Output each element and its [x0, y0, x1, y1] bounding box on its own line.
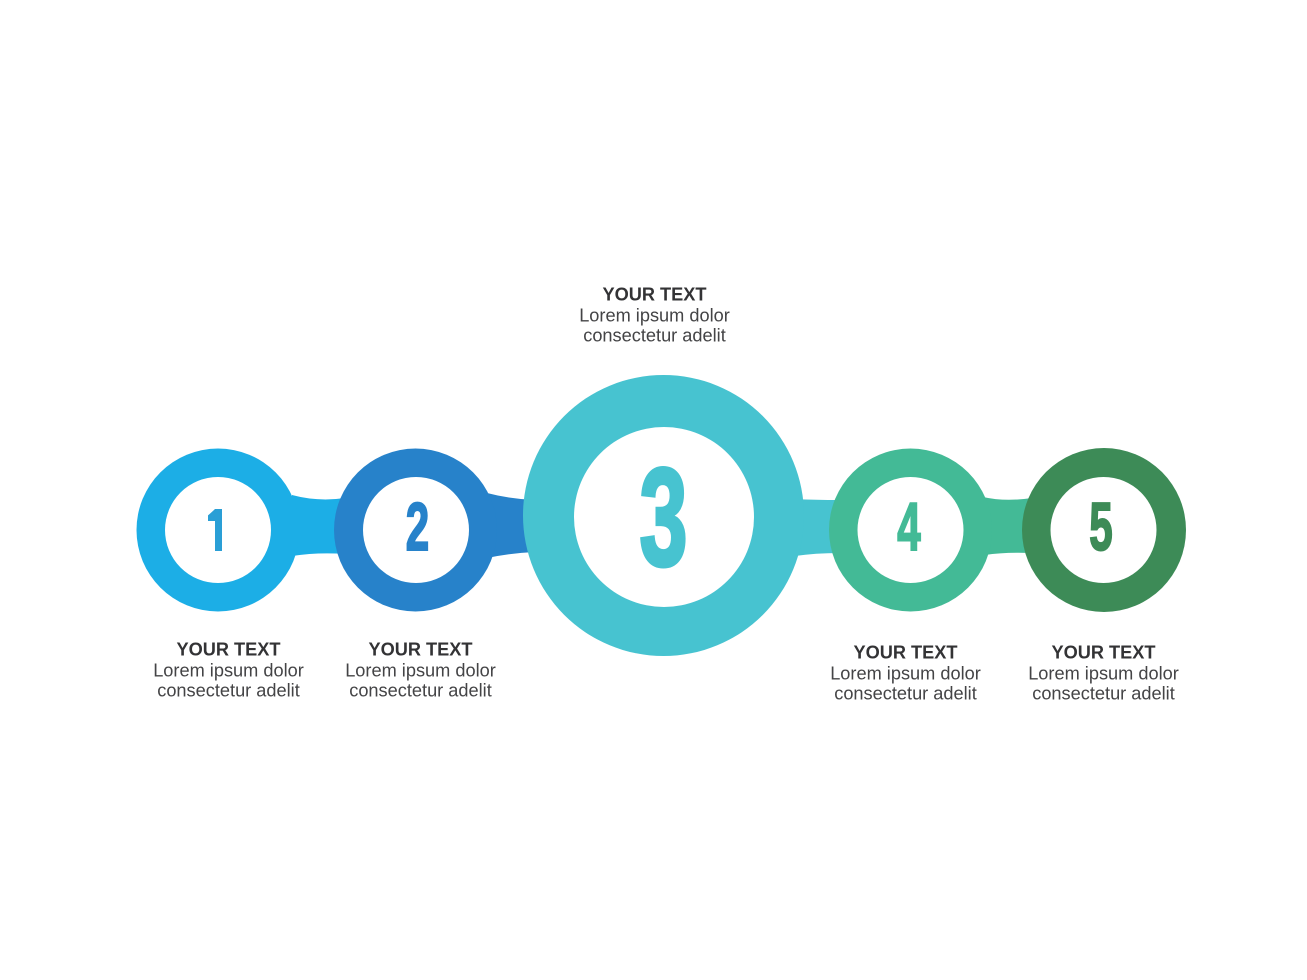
step 3 ring — [523, 375, 804, 656]
step 2 text — [345, 640, 496, 700]
step 4 number: 4 — [897, 489, 921, 564]
connector: step 2 to 3 — [487, 493, 535, 558]
step 3 text — [579, 284, 730, 346]
step 1 text: YOUR TEXT — [176, 640, 281, 660]
step 5 ring — [1022, 448, 1186, 612]
step 5 text: YOUR TEXT — [1051, 642, 1156, 662]
step 5 text: Lorem ipsum dolor — [1028, 664, 1179, 684]
step 5 number: 5 — [1089, 489, 1113, 564]
step 2 text: Lorem ipsum dolor — [345, 660, 496, 680]
step 1 number — [208, 509, 222, 551]
step 2 number: 2 — [406, 489, 429, 564]
step 2 ring — [334, 448, 497, 612]
step 2 text: YOUR TEXT — [368, 640, 473, 660]
infographic — [136, 288, 1186, 700]
step 1 text: consectetur adelit — [157, 680, 300, 700]
step 1 ring — [136, 448, 300, 612]
step 3 text: YOUR TEXT — [602, 284, 707, 304]
step 4 text: YOUR TEXT — [853, 642, 958, 662]
step 1 number: 1 — [204, 497, 230, 564]
connector: step 4 to 5 — [983, 497, 1032, 555]
step 4 ring — [829, 448, 992, 612]
step 3 text: Lorem ipsum dolor — [579, 306, 730, 326]
step 4 text: consectetur adelit — [834, 684, 977, 704]
step 4 text: Lorem ipsum dolor — [830, 664, 981, 684]
step 5 text — [1028, 642, 1179, 704]
step 3 text: consectetur adelit — [583, 326, 726, 346]
step 3 number: 3 — [640, 439, 687, 595]
step 4 text — [830, 642, 981, 704]
connector: step 1 to 2 — [292, 495, 345, 556]
step 5 text: consectetur adelit — [1032, 684, 1175, 704]
step 2 text: consectetur adelit — [349, 680, 492, 700]
step 1 text: Lorem ipsum dolor — [153, 660, 304, 680]
step 1 text — [153, 640, 304, 700]
connector: step 3 to 4 — [795, 499, 840, 556]
